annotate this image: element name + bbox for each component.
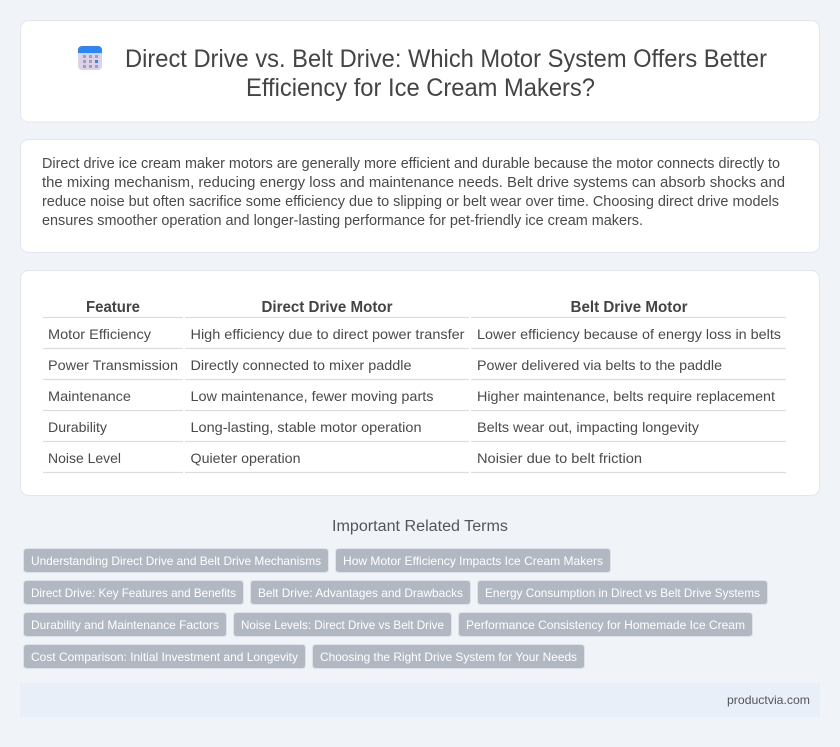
footer: [20, 683, 820, 717]
tag: Belt Drive: Advantages and Drawbacks: [258, 586, 463, 600]
row: noise level: Noise Level: [48, 450, 121, 466]
summary text: [42, 156, 785, 229]
summary text: Direct drive ice cream maker motors are generally more efficient and durable because the motor connects directly to: [42, 156, 780, 172]
tag: [336, 548, 610, 572]
tag: [458, 612, 752, 636]
row: power transmission: [48, 357, 722, 373]
row: durability: Long-lasting, stable motor operation: [190, 419, 422, 435]
row: durability: Durability: [48, 419, 107, 435]
tag: Cost Comparison: Initial Investment and Longevity: [31, 650, 298, 664]
tag: Understanding Direct Drive and Belt Drive Mechanisms: [31, 554, 321, 568]
row: maintenance: Higher maintenance, belts require replacement: [477, 388, 775, 404]
summary text: ensures smoother operation and longer-lasting performance for pet-friendly ice cream makers.: [42, 213, 643, 229]
table rules: [43, 318, 786, 472]
row: noise level: Quieter operation: [190, 450, 300, 466]
row: maintenance: Low maintenance, fewer moving parts: [190, 388, 434, 404]
row: motor efficiency: Motor Efficiency: [48, 326, 151, 342]
tag: [312, 644, 584, 668]
tag: [24, 580, 244, 604]
title text: Direct Drive vs. Belt Drive: Which Motor System Offers Better: [125, 45, 767, 73]
tag: [478, 580, 768, 604]
tag: [234, 612, 452, 636]
row: maintenance: [48, 388, 775, 404]
icon: calendar: [78, 46, 102, 70]
title text: Efficiency for Ice Cream Makers?: [246, 74, 595, 102]
table header: Direct Drive Motor: [262, 299, 392, 316]
row: motor efficiency: Lower efficiency because of energy loss in belts: [477, 326, 781, 342]
tag: Durability and Maintenance Factors: [31, 618, 219, 632]
tag: Choosing the Right Drive System for Your Needs: [320, 650, 577, 664]
row: durability: [48, 419, 699, 435]
row: maintenance: Maintenance: [48, 388, 131, 404]
tag: Energy Consumption in Direct vs Belt Drive Systems: [485, 586, 760, 600]
heading: important related terms: Important Related Terms: [332, 518, 508, 535]
panel: title: [20, 20, 820, 122]
row: power transmission: Power Transmission: [48, 357, 178, 373]
summary text: the mixing mechanism, reducing energy loss and maintenance needs. Belt drive systems can absorb shocks and: [42, 175, 785, 191]
title text: [125, 45, 767, 102]
tag: Performance Consistency for Homemade Ice Cream: [466, 618, 745, 632]
summary text: reduce noise but often sacrifice some efficiency due to slipping or belt wear over time. Choosing direct drive models: [42, 194, 779, 210]
tag: [24, 612, 226, 636]
tag: [250, 580, 470, 604]
panel: comparison table: [20, 270, 820, 496]
table header: Belt Drive Motor: [570, 299, 688, 316]
row: power transmission: Power delivered via belts to the paddle: [477, 357, 722, 373]
row: motor efficiency: High efficiency due to direct power transfer: [190, 326, 465, 342]
tag: [24, 644, 306, 668]
row: durability: Belts wear out, impacting longevity: [477, 419, 699, 435]
row: power transmission: Directly connected to mixer paddle: [190, 357, 412, 373]
table header: Feature: [86, 299, 140, 316]
footer source text: productvia.com: [727, 693, 810, 707]
row: noise level: Noisier due to belt friction: [477, 450, 642, 466]
row: motor efficiency: [48, 326, 781, 342]
panel: summary: [20, 140, 820, 252]
tag: Noise Levels: Direct Drive vs Belt Drive: [241, 618, 444, 632]
table header: [86, 299, 688, 316]
row: noise level: [48, 450, 642, 466]
tag: [24, 548, 328, 572]
tag: How Motor Efficiency Impacts Ice Cream Makers: [343, 554, 603, 568]
tag: Direct Drive: Key Features and Benefits: [31, 586, 236, 600]
related term tags: [24, 548, 768, 668]
